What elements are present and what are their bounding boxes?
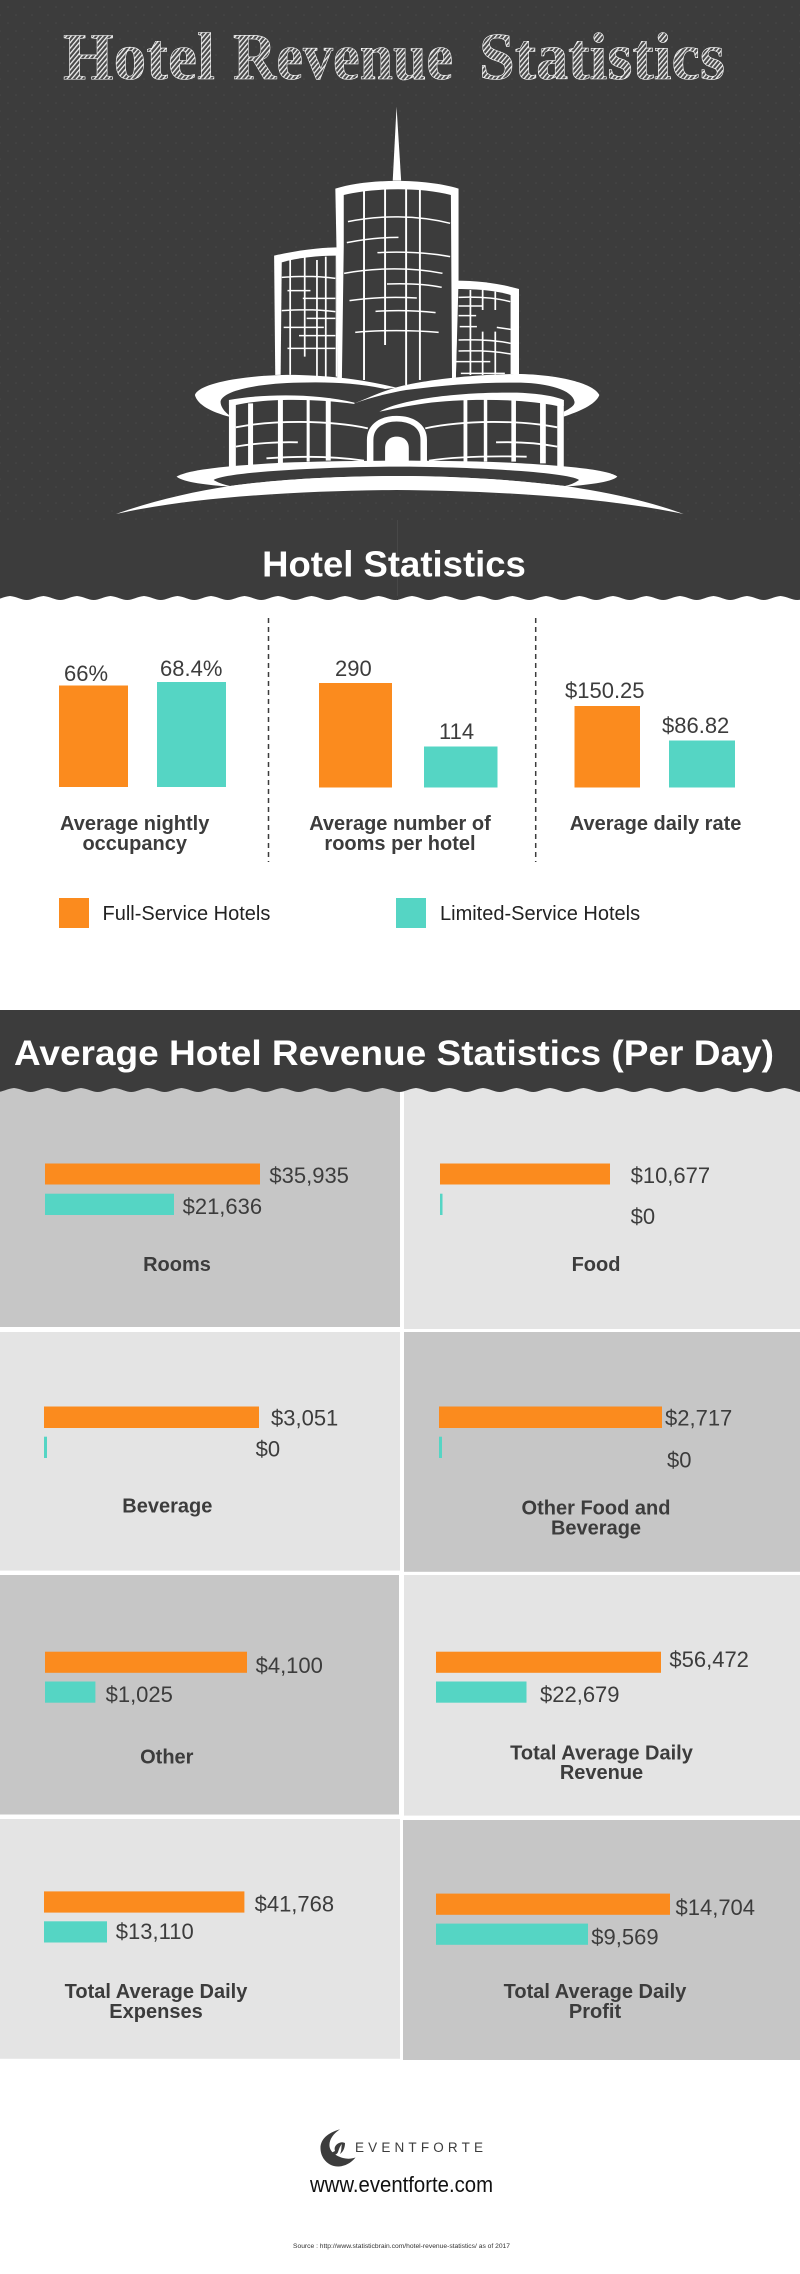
logo: eventforte [320, 2129, 483, 2167]
panel: total average daily profit: Total Average Daily [504, 1981, 687, 2003]
icon part: central tower [335, 181, 459, 385]
icon part: base [116, 461, 684, 514]
icon part: spire [393, 107, 401, 181]
panel: total average daily expenses: Total Average Daily [65, 1981, 248, 2003]
chart: average number of rooms per hotel [309, 656, 498, 855]
panel: dark header background [0, 0, 800, 601]
chart: average nightly occupancy: Average nightly [60, 813, 210, 835]
panel: food [404, 1088, 800, 1329]
chart: average nightly occupancy: 66% [64, 661, 108, 686]
panel: other: $4,100 [256, 1653, 323, 1678]
icon part: lower building backing [195, 374, 599, 467]
panel: rooms: $35,935 [269, 1163, 349, 1188]
title: Statistics [479, 20, 725, 94]
chart: average number of rooms per hotel: 114 [439, 719, 474, 744]
panel: total average daily profit: $14,704 [676, 1895, 755, 1920]
heading: average hotel revenue statistics: Average Hotel Revenue Statistics (Per Day) [14, 1034, 774, 1073]
wave edge: revenue banner [0, 1088, 800, 1093]
panel: total average daily profit [403, 1820, 800, 2060]
chart: average daily rate: Average daily rate [570, 813, 741, 835]
chart: average number of rooms per hotel: rooms per hotel [324, 833, 476, 855]
logo wordmark: EVENTFORTE [355, 2140, 483, 2155]
panel: total average daily expenses: $41,768 [255, 1892, 334, 1916]
panel: rooms: $21,636 [183, 1194, 262, 1219]
panel: other: Other [140, 1746, 194, 1768]
icon part: entrance arch [370, 419, 424, 463]
website url: www.eventforte.com [309, 2172, 493, 2197]
panel: total average daily revenue: $56,472 [669, 1647, 749, 1672]
panel: beverage: Beverage [122, 1496, 212, 1518]
panel: total average daily revenue [404, 1575, 800, 1816]
panel: total average daily revenue: Revenue [560, 1762, 643, 1784]
chart: average daily rate [565, 678, 741, 835]
panel: rooms [0, 1088, 400, 1327]
panel: other [0, 1575, 399, 1814]
chart: average nightly occupancy [59, 656, 226, 855]
legend: Limited-Service Hotels [440, 903, 640, 925]
icon part: lower building walls and windows [229, 398, 564, 467]
chart: average nightly occupancy: occupancy [82, 833, 188, 855]
panel: other food and beverage: $0 [667, 1448, 691, 1472]
panel: total average daily revenue: $22,679 [540, 1682, 620, 1707]
dashed dividers [268, 618, 536, 862]
panel: total average daily expenses: Expenses [109, 2001, 203, 2023]
icon part: roof ring [195, 374, 599, 417]
source note: Source : http://www.statisticbrain.com/hotel-revenue-statistics/ as of 2017 [293, 2243, 510, 2250]
icon: hotel building [116, 107, 684, 514]
chart: average number of rooms per hotel: 290 [335, 656, 372, 681]
panel: total average daily expenses [0, 1819, 400, 2059]
panel: other food and beverage: Beverage [551, 1518, 641, 1540]
chart: average daily rate: $150.25 [565, 678, 645, 703]
panel: total average daily profit: Profit [569, 2001, 621, 2023]
chart: average nightly occupancy: 68.4% [160, 656, 222, 681]
panel: total average daily expenses: $13,110 [116, 1919, 194, 1944]
icon part: left tower [274, 247, 337, 378]
panel: other food and beverage: $2,717 [665, 1406, 732, 1430]
panel: food: $10,677 [631, 1163, 710, 1188]
title: Hotel [63, 20, 215, 94]
panel: food: $0 [631, 1204, 655, 1229]
panel: beverage [0, 1332, 400, 1571]
heading: hotel statistics: Hotel Statistics [262, 544, 526, 584]
legend [59, 898, 640, 928]
chart: average daily rate: $86.82 [662, 713, 729, 738]
panel: rooms: Rooms [143, 1254, 211, 1276]
panel: banner per day [0, 1010, 800, 1088]
panel: total average daily profit: $9,569 [591, 1924, 659, 1949]
panel: beverage: $3,051 [271, 1406, 338, 1430]
legend: Full-Service Hotels [102, 903, 270, 925]
panel: other food and beverage [404, 1332, 800, 1572]
panel: beverage: $0 [256, 1436, 280, 1462]
logo mark [320, 2129, 356, 2167]
chart: average number of rooms per hotel: Average number of [309, 813, 491, 835]
title: Revenue [233, 20, 453, 94]
icon part: right tower [454, 281, 519, 378]
panel: other: $1,025 [106, 1682, 173, 1707]
panel: other food and beverage: Other Food and [522, 1498, 670, 1520]
panel: food: Food [572, 1254, 620, 1276]
panel: total average daily revenue: Total Average Daily [510, 1742, 694, 1764]
